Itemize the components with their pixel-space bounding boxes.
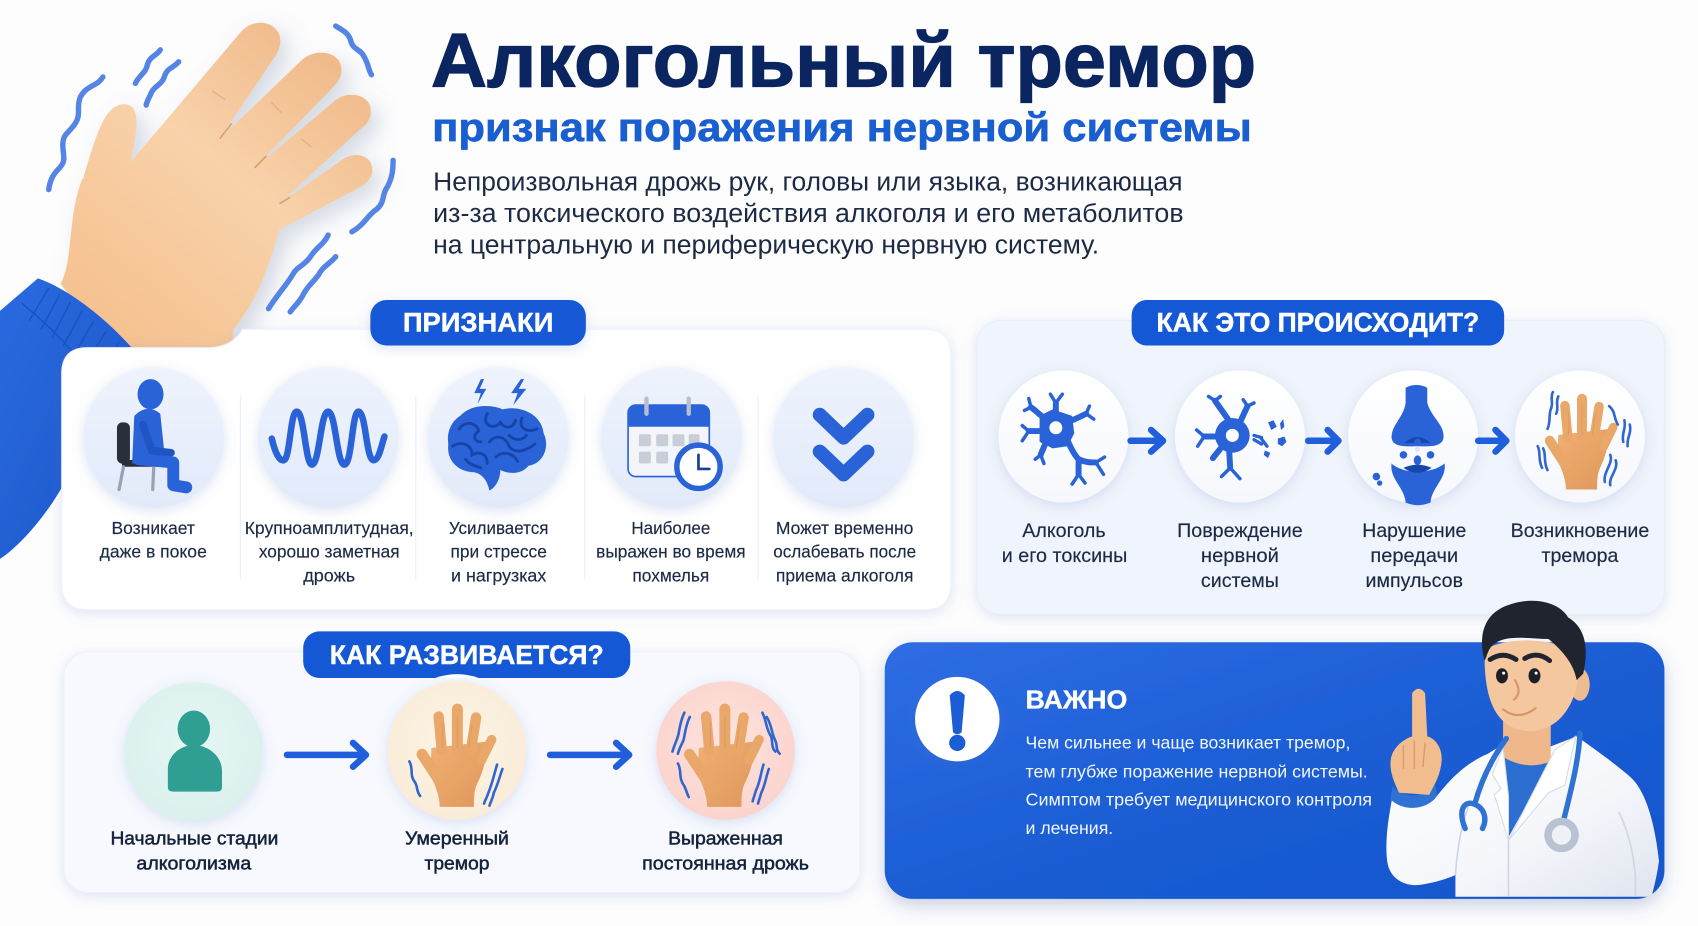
icon: exclamation mark	[915, 677, 1000, 761]
arrow	[1131, 430, 1163, 452]
heading pill: signs: ПРИЗНАКИ	[403, 306, 553, 337]
neck	[1503, 715, 1551, 773]
panel: how it develops	[64, 631, 860, 892]
label: damage: Повреждение	[1177, 520, 1303, 542]
title: Алкогольный тремор	[431, 19, 1256, 104]
description text	[433, 167, 1184, 259]
label: stress	[449, 518, 548, 586]
label: at rest: даже в покое	[100, 542, 207, 562]
icon: double chevron down	[773, 367, 914, 508]
icon: tremor wave	[258, 367, 399, 508]
tremor waves	[49, 26, 393, 312]
dividers	[240, 395, 758, 579]
label: impulses	[1362, 520, 1466, 592]
label: weakens: ослабевать после	[773, 542, 916, 562]
label: hangover	[596, 518, 746, 586]
heading pill: signs	[370, 300, 586, 346]
icon: damaged neuron	[1175, 370, 1305, 503]
important text: Симптом требует медицинского контроля	[1026, 790, 1372, 810]
label: tremor onset: тремора	[1542, 545, 1619, 567]
illustration: doctor	[1386, 601, 1659, 897]
important text: Чем сильнее и чаще возникает тремор,	[1026, 732, 1350, 752]
label: damage	[1177, 520, 1303, 592]
stethoscope	[1462, 733, 1580, 828]
label: impulses: передачи	[1370, 545, 1458, 567]
label: stress: и нагрузках	[451, 566, 546, 586]
label: amplitude: хорошо заметная	[259, 542, 400, 562]
icon: synapse	[1348, 370, 1478, 505]
arrow	[287, 743, 366, 767]
label: tremor onset	[1511, 520, 1649, 567]
important text: и лечения.	[1026, 818, 1113, 838]
hair	[1482, 601, 1586, 680]
panel background	[977, 321, 1664, 614]
label: weakens: Может временно	[776, 518, 913, 538]
label: impulses: Нарушение	[1362, 520, 1466, 542]
cuff	[1390, 782, 1437, 808]
label: early stage	[110, 828, 278, 874]
head	[1570, 668, 1590, 701]
eyes	[1496, 668, 1508, 683]
label: severe: Выраженная	[668, 828, 783, 849]
heading pill: how it develops: КАК РАЗВИВАЕТСЯ?	[330, 639, 604, 670]
description text: Непроизвольная дрожь рук, головы или языка, возникающая	[433, 167, 1183, 197]
label: severe	[642, 828, 809, 874]
label: stress: Усиливается	[449, 518, 548, 538]
subtitle: признак поражения нервной системы	[432, 106, 1252, 150]
illustration: trembling hand with sleeve	[0, 23, 393, 559]
panel: signs	[62, 300, 951, 610]
panel background	[64, 652, 860, 892]
brows	[1490, 655, 1550, 661]
heading pill: how it develops	[303, 631, 630, 678]
label: at rest	[100, 518, 207, 562]
icon: neuron	[998, 370, 1128, 503]
panel: how it happens	[977, 300, 1664, 614]
label: hangover: Наиболее	[631, 518, 710, 538]
label: stress: при стрессе	[450, 542, 547, 562]
label: moderate: Умеренный	[405, 828, 509, 849]
shirt	[1503, 757, 1551, 837]
heading pill: how it happens: КАК ЭТО ПРОИСХОДИТ?	[1157, 306, 1479, 337]
heading pill: how it happens	[1132, 300, 1504, 346]
icon: person sitting	[83, 367, 224, 508]
panel: important	[885, 601, 1664, 899]
label: severe: постоянная дрожь	[642, 853, 809, 874]
icon: brain with lightning	[428, 367, 569, 508]
label: hangover: похмелья	[632, 566, 709, 586]
lapels	[1492, 736, 1576, 840]
panel background	[885, 642, 1664, 899]
icon: calendar with clock	[601, 367, 742, 508]
arrow	[1308, 430, 1338, 452]
icon: severe tremor hand	[656, 681, 795, 820]
arrow	[550, 743, 629, 767]
arrow	[1478, 430, 1506, 452]
label: amplitude	[245, 518, 414, 586]
label: hangover: выражен во время	[596, 542, 746, 562]
icon: trembling hand	[1515, 370, 1645, 503]
hand pointing	[1390, 689, 1442, 795]
stage circle behind heading	[388, 681, 526, 820]
label: at rest: Возникает	[112, 518, 195, 538]
important text: тем глубже поражение нервной системы.	[1026, 762, 1368, 782]
label: weakens	[773, 518, 916, 586]
icon: moderate tremor hand	[409, 709, 502, 807]
label: moderate	[405, 828, 509, 874]
label: alcohol	[1002, 520, 1127, 567]
coat	[1386, 736, 1659, 897]
label: tremor onset: Возникновение	[1511, 520, 1649, 542]
hand	[61, 23, 372, 363]
label: early stage: алкоголизма	[136, 853, 252, 874]
label: damage: нервной	[1201, 545, 1279, 567]
label: weakens: приема алкоголя	[776, 566, 913, 586]
label: amplitude: дрожь	[303, 566, 355, 586]
label: alcohol: и его токсины	[1002, 545, 1127, 567]
heading: important: ВАЖНО	[1026, 684, 1127, 714]
panel background	[62, 329, 951, 610]
label: damage: системы	[1201, 570, 1279, 592]
label: impulses: импульсов	[1366, 570, 1463, 592]
description text: из-за токсического воздействия алкоголя и его метаболитов	[433, 198, 1184, 228]
description text: на центральную и периферическую нервную систему.	[433, 229, 1099, 259]
cuff ribbing	[22, 288, 119, 379]
nose and smile	[1503, 680, 1536, 715]
important text	[1026, 732, 1372, 838]
label: early stage: Начальные стадии	[110, 828, 278, 849]
sleeve	[0, 278, 135, 559]
label: amplitude: Крупноамплитудная,	[245, 518, 414, 538]
label: moderate: тремор	[424, 853, 489, 874]
label: alcohol: Алкоголь	[1022, 520, 1106, 542]
icon: person early stage	[125, 682, 263, 821]
